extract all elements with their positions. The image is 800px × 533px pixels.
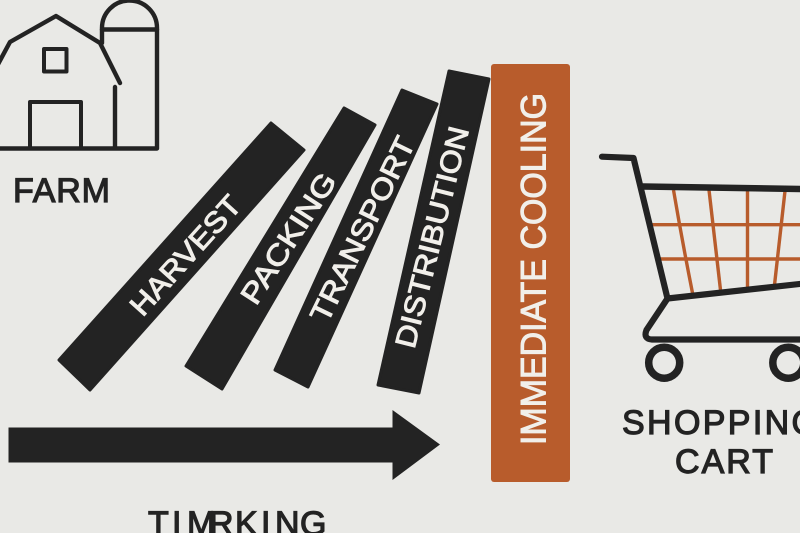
bar: harvest: HARVEST — [124, 189, 248, 322]
icon: shopping cart — [602, 157, 800, 378]
bar: distribution: DISTRIBUTION — [390, 123, 476, 351]
bar: distribution — [378, 71, 489, 393]
bar: transport — [275, 90, 437, 387]
arrow: timeline — [8, 410, 440, 480]
label: shopping cart: CART — [675, 443, 773, 481]
label: farm: FARM — [13, 172, 110, 210]
bar: immediate cooling — [491, 64, 570, 482]
bar: immediate cooling: IMMEDIATE COOLING — [514, 93, 554, 445]
label: shopping cart — [622, 404, 800, 481]
bar: transport: TRANSPORT — [305, 132, 422, 327]
cart basket grid — [652, 190, 800, 293]
cart wheels — [649, 347, 800, 378]
bar: harvest — [59, 123, 304, 390]
bar: packing — [186, 108, 375, 389]
cart frame — [602, 157, 800, 340]
bar: packing: PACKING — [235, 167, 344, 310]
icon: farm barn and silo — [0, 0, 157, 148]
